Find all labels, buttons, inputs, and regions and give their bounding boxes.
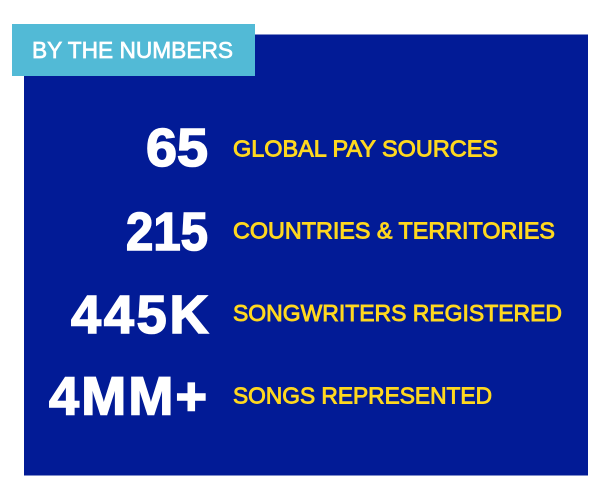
stat: 215 countries and territories bbox=[126, 202, 555, 262]
stat: 65 global pay sources bbox=[146, 118, 498, 178]
stat: 215 countries and territories: COUNTRIES & TERRITORIES bbox=[233, 218, 555, 244]
stat: 445K songwriters registered: SONGWRITERS REGISTERED bbox=[233, 300, 562, 326]
stat: 445K songwriters registered bbox=[71, 285, 562, 345]
heading tag: by the numbers: BY THE NUMBERS bbox=[32, 37, 233, 63]
stat: 215 countries and territories: 215 bbox=[126, 202, 208, 262]
stat: 4MM+ songs represented: 4MM+ bbox=[49, 366, 207, 426]
stat: 65 global pay sources: GLOBAL PAY SOURCES bbox=[233, 136, 498, 162]
stat: 65 global pay sources: 65 bbox=[146, 118, 208, 178]
stat: 445K songwriters registered: 445K bbox=[71, 285, 208, 345]
heading tag: by the numbers bbox=[12, 24, 255, 76]
stat: 4MM+ songs represented bbox=[49, 366, 492, 426]
stat: 4MM+ songs represented: SONGS REPRESENTED bbox=[233, 382, 492, 408]
